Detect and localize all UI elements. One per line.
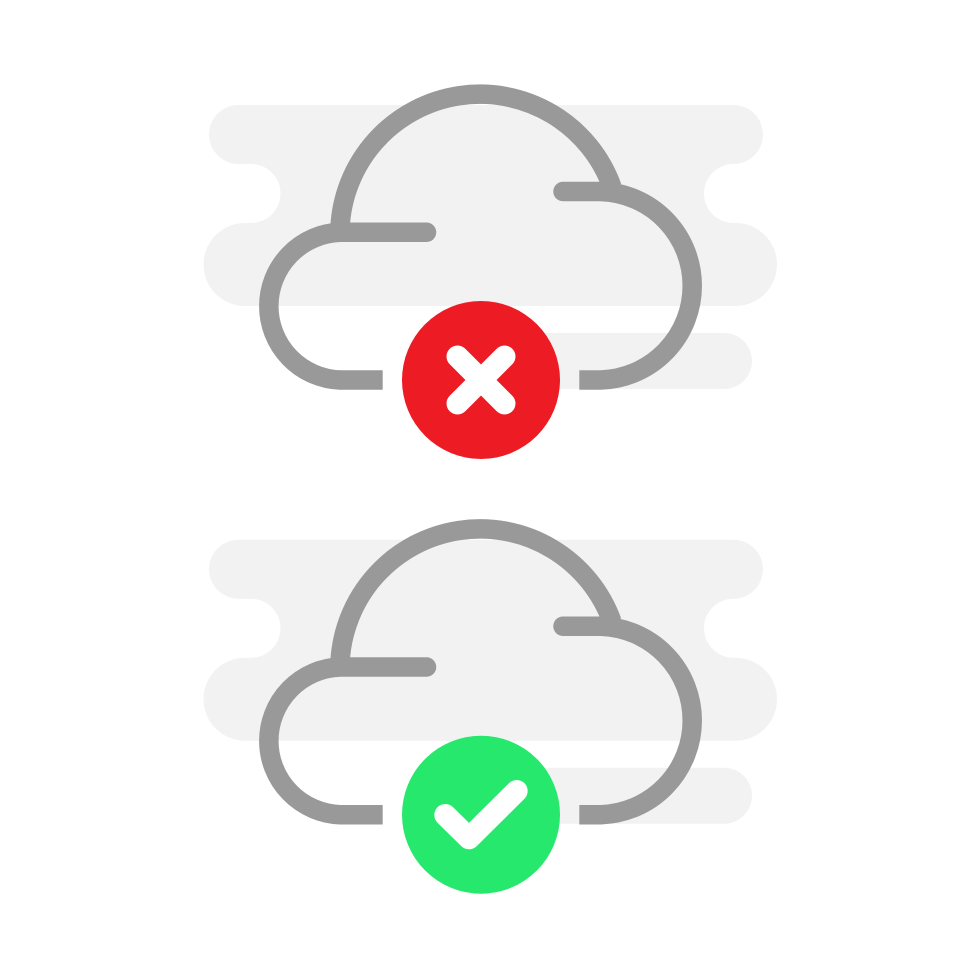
icon: grey cloud outline	[269, 529, 692, 815]
icon: green success badge with check mark	[402, 736, 560, 894]
background shape: lower pale band	[500, 768, 752, 824]
icon: grey cloud outline	[269, 94, 692, 380]
background shape: upper pale cloud bands	[203, 540, 777, 741]
background shape: lower pale band	[500, 333, 752, 389]
panel: cloud with success status	[203, 529, 777, 894]
background shape: upper pale cloud bands	[203, 105, 777, 306]
icon: red error badge with cross	[402, 301, 560, 459]
panel: cloud with error status	[203, 94, 777, 459]
